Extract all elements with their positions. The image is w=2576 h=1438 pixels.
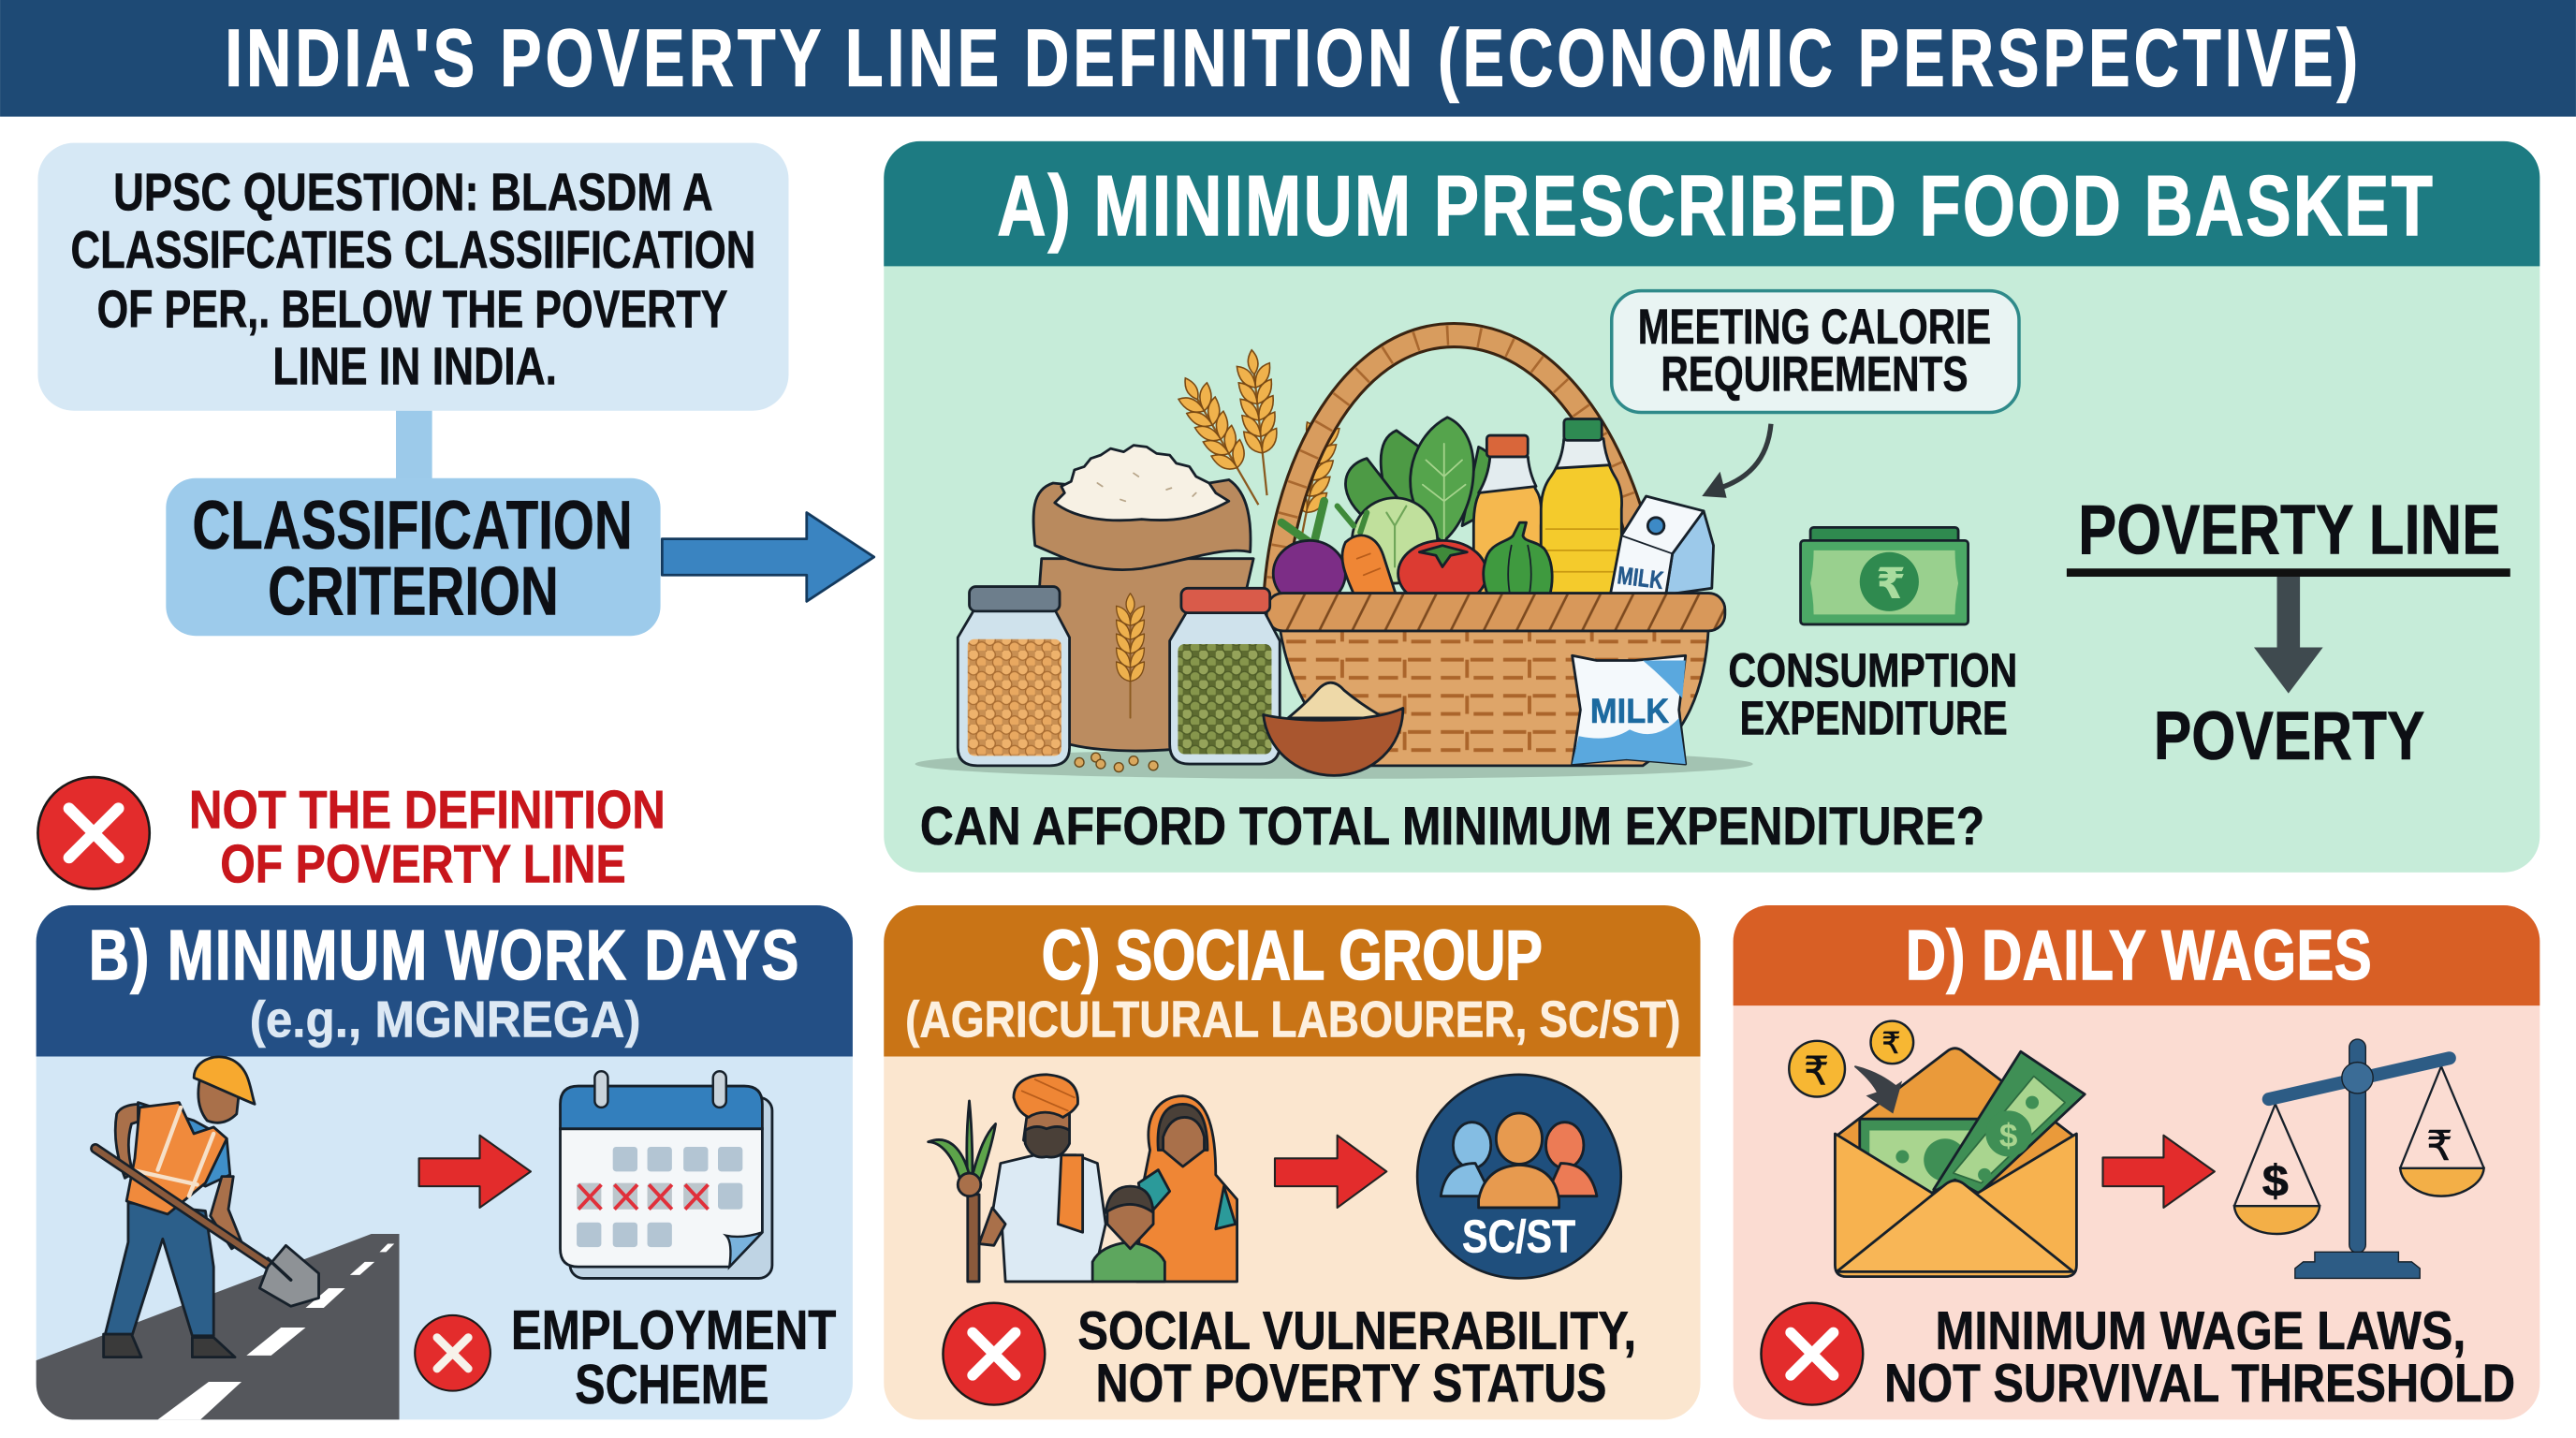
icon: milk carton: MILK xyxy=(1616,561,1665,594)
callout: not the definition of poverty line xyxy=(37,777,666,894)
heading: B xyxy=(37,905,853,1056)
icon: wage envelope with banknotes xyxy=(1835,1049,2085,1277)
icon: oil bottle small xyxy=(1473,435,1542,594)
plant and staff xyxy=(929,1101,996,1282)
icon: SC/ST group badge xyxy=(1417,1075,1621,1278)
icon: milk carton xyxy=(1610,496,1714,596)
heading: A: A) MINIMUM PRESCRIBED FOOD BASKET xyxy=(997,159,2433,254)
heading: C xyxy=(884,905,1701,1056)
illustration: worker with shovel xyxy=(95,1057,319,1357)
icon: balance scale xyxy=(2234,1039,2484,1278)
callout: meeting calorie requirements xyxy=(1612,291,2019,413)
icon: jar of green lentils xyxy=(1170,588,1280,764)
heading: B: B) MINIMUM WORK DAYS xyxy=(89,916,798,995)
icon: carrot xyxy=(1338,506,1398,601)
icon: rupee coins: ₹ xyxy=(1804,1048,1829,1093)
icon: balance scale: ₹ xyxy=(2426,1123,2452,1170)
illustration: farming family xyxy=(929,1075,1237,1282)
icon: rupee coins: ₹ xyxy=(1881,1027,1901,1061)
callout: employment scheme xyxy=(415,1299,836,1416)
panel: UPSC question: CLASSIFCATIES CLASSIIFICATION xyxy=(71,220,755,279)
arrow: B xyxy=(419,1136,531,1208)
icon: tomato xyxy=(1398,540,1486,607)
callout: social vulnerability xyxy=(943,1301,1636,1414)
panel: C social group xyxy=(884,905,1701,1419)
connector: question to criterion xyxy=(396,411,432,479)
panel: UPSC question: UPSC QUESTION: BLASDM A xyxy=(113,163,713,222)
icon: wicker basket body xyxy=(1266,594,1725,766)
panel: UPSC question: LINE IN INDIA. xyxy=(272,337,557,396)
icon: balance scale: $ xyxy=(2262,1157,2289,1207)
box: classification criterion: CRITERION xyxy=(268,551,559,629)
arrow: C xyxy=(1275,1136,1386,1208)
callout: minimum wage laws: MINIMUM WAGE LAWS, xyxy=(1935,1301,2466,1361)
man xyxy=(979,1075,1105,1282)
icon: milk packet xyxy=(1573,655,1686,764)
icon: jar of chickpeas xyxy=(958,587,1070,766)
icon: rice sack xyxy=(1033,446,1253,751)
callout: employment scheme: EMPLOYMENT xyxy=(511,1299,836,1361)
title bar xyxy=(0,0,2576,117)
icon: curved arrow into envelope xyxy=(1854,1066,1901,1112)
box: classification criterion xyxy=(166,478,661,636)
callout: social vulnerability: SOCIAL VULNERABILITY, xyxy=(1077,1301,1636,1361)
callout: meeting calorie requirements: MEETING CALORIE xyxy=(1638,300,1991,355)
diagram: poverty line: POVERTY xyxy=(2154,697,2424,774)
box: classification criterion: CLASSIFICATION xyxy=(192,486,633,564)
heading: C: (AGRICULTURAL LABOURER, SC/ST) xyxy=(905,990,1680,1048)
icon: bowl of grain xyxy=(1264,682,1403,775)
heading: C: C) SOCIAL GROUP xyxy=(1042,916,1543,995)
icon: rupee coins xyxy=(1789,1021,1913,1096)
woman xyxy=(1137,1096,1237,1282)
callout: not the definition of poverty line: OF POVERTY LINE xyxy=(220,834,626,894)
icon: wheat stalks xyxy=(1171,348,1342,557)
icon: lentil dots xyxy=(1075,753,1158,772)
heading: B: (e.g., MGNREGA) xyxy=(250,990,641,1048)
icon: milk packet: MILK xyxy=(1590,692,1670,730)
panel: D daily wages xyxy=(1734,905,2539,1419)
panel: UPSC question xyxy=(37,143,788,411)
callout: meeting calorie requirements: REQUIREMENTS xyxy=(1661,347,1969,403)
callout: employment scheme: SCHEME xyxy=(575,1353,768,1416)
icon: leafy greens xyxy=(1345,418,1497,542)
icon: cabbage xyxy=(1352,498,1438,583)
icon: beetroot xyxy=(1273,501,1345,607)
panel: A minimum prescribed food basket xyxy=(884,141,2539,873)
illustration: road xyxy=(37,1234,400,1419)
panel: UPSC question: OF PER,. BELOW THE POVERTY xyxy=(97,279,728,338)
callout: not the definition of poverty line: NOT THE DEFINITION xyxy=(189,781,666,841)
icon: wage envelope with banknotes: $ xyxy=(1999,1118,2018,1154)
callout: social vulnerability: NOT POVERTY STATUS xyxy=(1096,1354,1606,1414)
illustration: food basket xyxy=(915,335,1753,779)
heading: D xyxy=(1734,905,2539,1005)
icon: rupee banknote: ₹ xyxy=(1876,559,1906,609)
title bar: INDIA'S POVERTY LINE DEFINITION (ECONOMIC PERSPECTIVE) xyxy=(225,14,2358,103)
diagram: poverty line xyxy=(2067,490,2510,774)
icon: basket handle xyxy=(1275,335,1643,611)
label: consumption expenditure: CONSUMPTION xyxy=(1728,644,2017,697)
heading: D: D) DAILY WAGES xyxy=(1906,916,2372,995)
icon: green pepper xyxy=(1484,522,1552,601)
icon: oil bottle large xyxy=(1541,419,1622,598)
arrow: criterion to food basket xyxy=(662,513,874,601)
child xyxy=(1092,1186,1164,1282)
callout: minimum wage laws xyxy=(1761,1301,2515,1414)
arrow: D xyxy=(2102,1136,2215,1208)
label: consumption expenditure: EXPENDITURE xyxy=(1740,691,2008,744)
arrow: callout to basket xyxy=(1702,424,1771,498)
icon: rupee banknote xyxy=(1801,527,1969,624)
text: can afford total minimum expenditure: CAN AFFORD TOTAL MINIMUM EXPENDITURE? xyxy=(920,797,1984,857)
icon: SC/ST group badge: SC/ST xyxy=(1462,1211,1575,1262)
panel: B minimum work days xyxy=(37,905,853,1419)
heading: A xyxy=(884,141,2539,266)
label: consumption expenditure xyxy=(1728,644,2017,744)
icon: calendar with crossed days xyxy=(561,1071,772,1278)
